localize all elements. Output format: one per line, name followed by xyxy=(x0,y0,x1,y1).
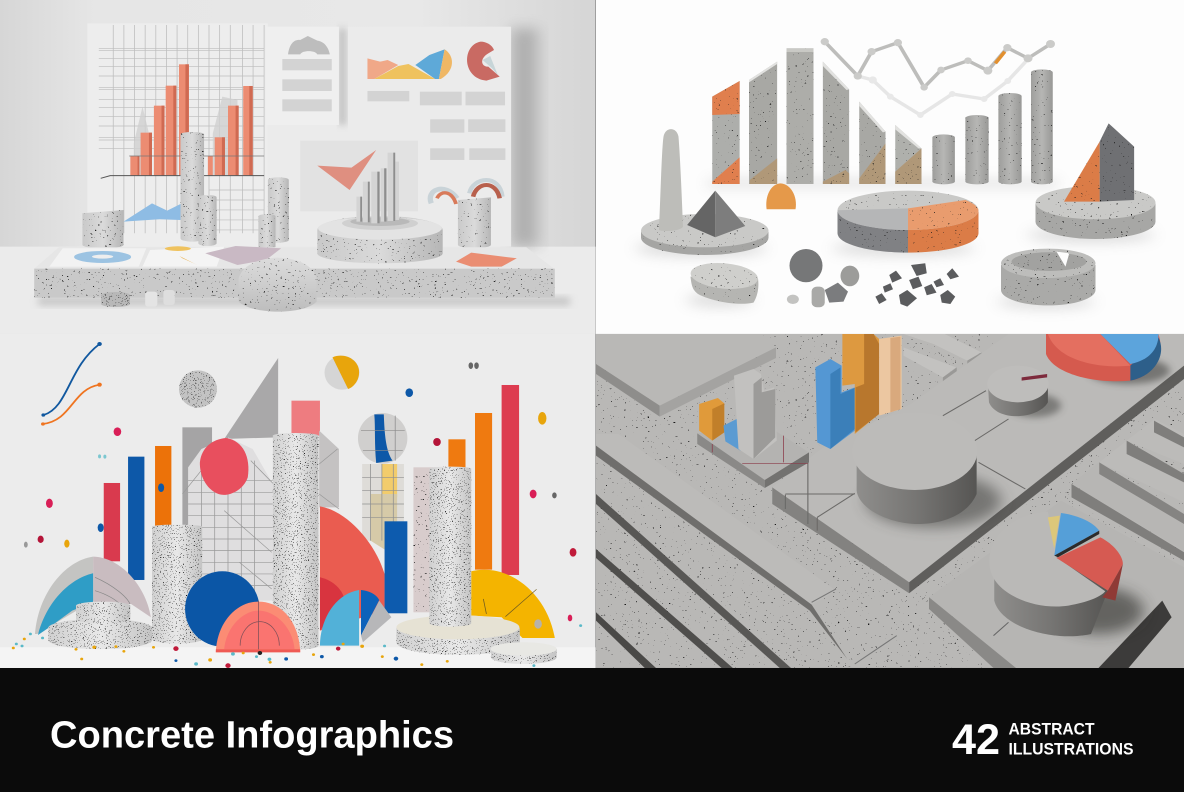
grid chart backdrop xyxy=(99,25,264,233)
small pucks xyxy=(101,290,175,307)
large pie cylinder xyxy=(989,512,1144,636)
lower right plate xyxy=(929,501,1184,668)
white line chart xyxy=(858,60,1027,118)
stacked discs left xyxy=(48,602,152,649)
top slats xyxy=(904,334,982,385)
grey and teal fan xyxy=(35,557,151,635)
small cylinder xyxy=(987,366,1061,417)
title: Concrete Infographics xyxy=(50,714,454,756)
triangle chart card xyxy=(300,141,418,211)
blue area chart xyxy=(124,203,181,222)
tall color bars xyxy=(104,385,519,580)
small base with bars xyxy=(697,369,809,488)
wall board with shadow xyxy=(87,23,538,247)
big cylinder xyxy=(852,413,1001,527)
bar group: angled concrete columns xyxy=(712,48,922,184)
panel: concrete display with charts on a wall xyxy=(0,0,596,334)
ground shadows xyxy=(635,180,1155,308)
colored area chart xyxy=(367,49,452,79)
blue and orange tower bars xyxy=(815,334,902,449)
yellow fan right xyxy=(471,570,555,638)
grey line chart xyxy=(821,38,1055,91)
small concrete oval block xyxy=(689,260,759,304)
orange bar chart xyxy=(101,64,264,178)
main large plate xyxy=(772,334,1184,593)
illustration count: ABSTRACT xyxy=(1008,720,1094,738)
confetti dots xyxy=(12,362,582,668)
right speckled cylinder xyxy=(429,467,471,627)
panel: colorful abstract bar chart city xyxy=(0,334,596,668)
diagonal stair stripes left xyxy=(596,434,897,668)
grey speckled ball xyxy=(179,370,217,408)
grey triangle and grid house xyxy=(182,358,339,601)
round base with peg and pyramid xyxy=(641,129,768,255)
blue circle xyxy=(185,571,260,647)
grid circle with blue strip xyxy=(358,413,407,464)
pink rear cylinder xyxy=(413,467,436,612)
blue bar right xyxy=(385,521,407,613)
illustration count: ILLUSTRATIONS xyxy=(1008,740,1134,758)
red blob circle xyxy=(200,438,248,495)
center pie disc xyxy=(838,191,978,253)
broken concrete ring xyxy=(1001,249,1096,305)
panel: isometric concrete slabs with pies xyxy=(596,334,1184,668)
round pedestal with spires xyxy=(317,153,443,263)
grid panel with yellow band xyxy=(362,464,404,557)
text placeholder blocks xyxy=(367,91,505,160)
concrete platform xyxy=(34,247,570,306)
mini donut charts xyxy=(430,180,502,204)
illustration count: 42 xyxy=(952,716,1000,764)
right stairs xyxy=(1072,419,1184,561)
foreground dome block xyxy=(239,258,317,312)
yellow half circle xyxy=(325,356,359,390)
red fan shape xyxy=(320,506,385,631)
right disc with orange triangle and dark block xyxy=(1036,123,1156,239)
illustration count xyxy=(952,716,1134,764)
paper sheet with grey arch xyxy=(282,26,348,127)
red donut chart xyxy=(467,42,500,81)
trend lines xyxy=(41,342,102,426)
blue pie on floor xyxy=(320,590,391,646)
top-left slab xyxy=(596,334,776,417)
orange dome xyxy=(766,183,796,209)
base discs right xyxy=(396,615,557,664)
red and blue pie top right xyxy=(1046,334,1170,384)
coral half circle xyxy=(216,601,300,654)
footer band xyxy=(0,668,1184,792)
panel: speckled concrete shapes on white xyxy=(596,0,1184,334)
back cylinders xyxy=(82,132,491,249)
spheres and stones xyxy=(787,249,959,307)
bar group: concrete cylinders xyxy=(932,69,1053,184)
colored sheets on platform xyxy=(49,246,517,267)
speckled cylinders xyxy=(152,433,318,650)
